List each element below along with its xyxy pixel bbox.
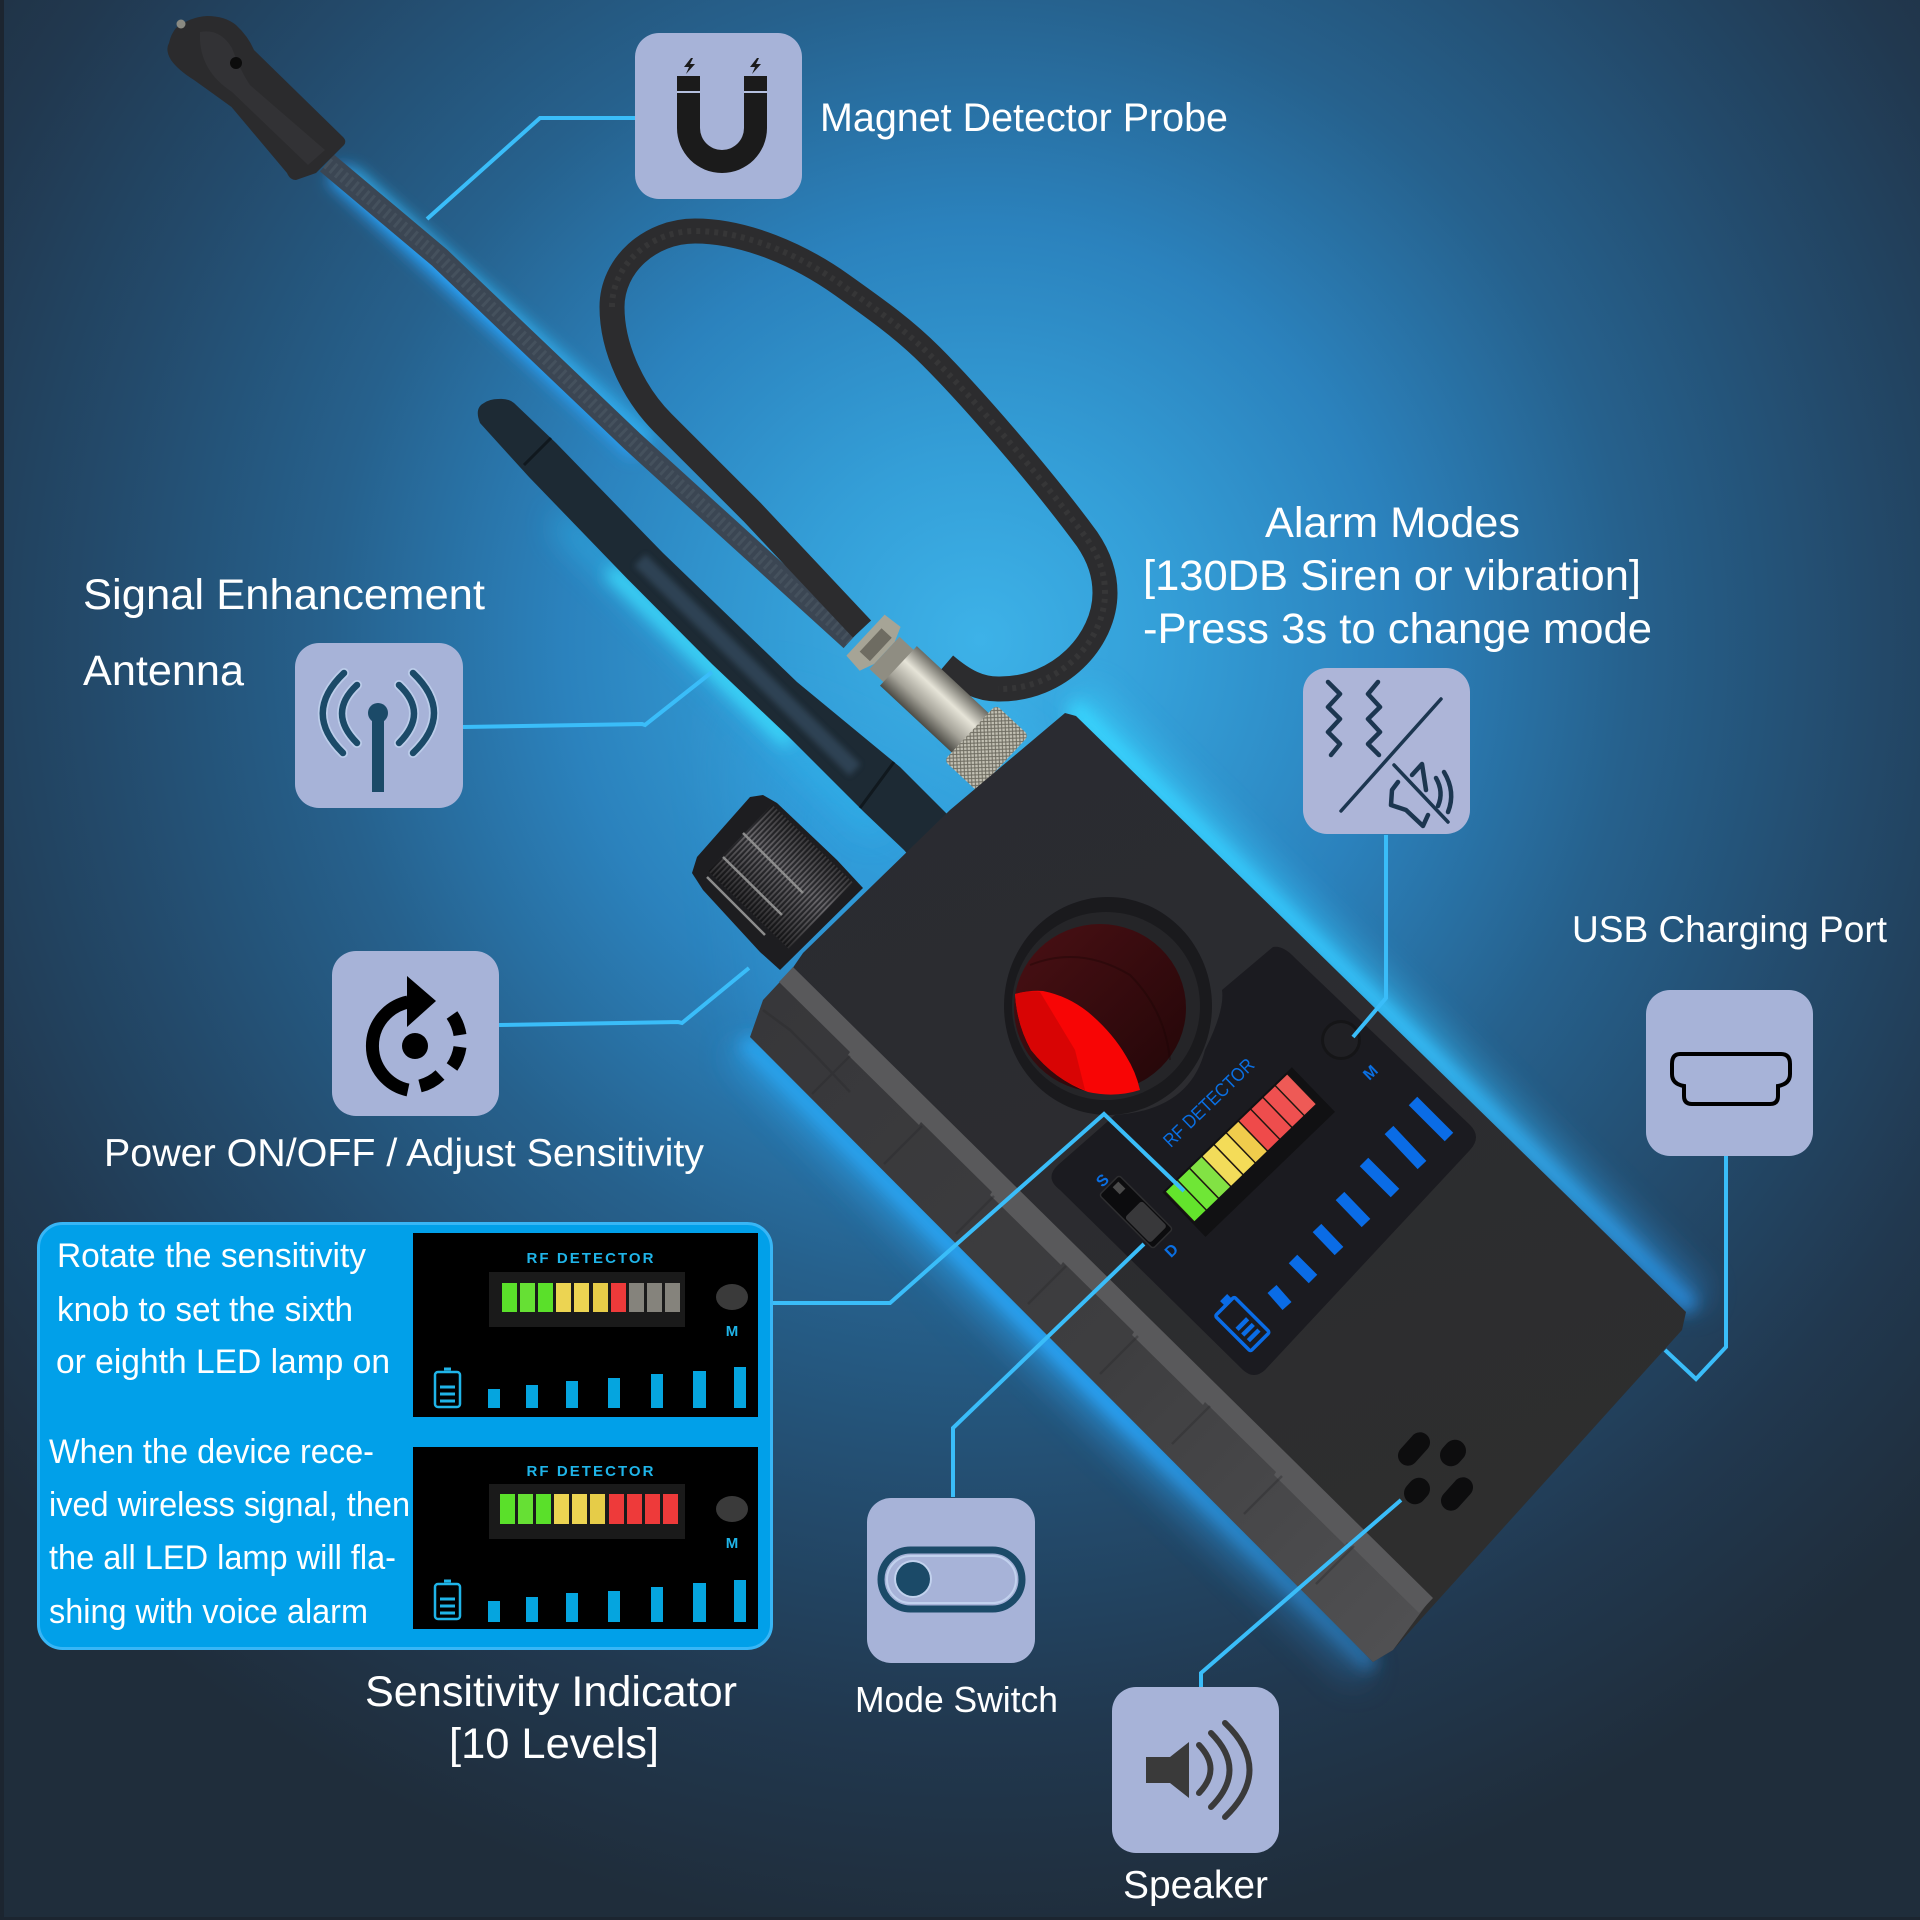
sensitivity indicator label: Sensitivity Indicator (365, 1668, 737, 1716)
antenna icon tile (295, 643, 463, 808)
panel text: rotate: Rotate the sensitivity (57, 1237, 366, 1275)
LED bar (1162, 1067, 1335, 1237)
D label: D (1162, 1241, 1182, 1261)
usb icon tile (1646, 990, 1813, 1156)
M label: M (1360, 1062, 1382, 1084)
control panel (1004, 897, 1476, 1375)
connector (840, 607, 1029, 791)
panel text: alarm: ived wireless signal, then (49, 1486, 410, 1524)
leader lines (427, 118, 1726, 1687)
speaker holes (1394, 1428, 1477, 1515)
magnet icon tile (635, 33, 802, 199)
panel text: rotate: or eighth LED lamp on (56, 1343, 390, 1381)
probe head (167, 16, 345, 180)
alarm modes label: Alarm Modes (1265, 499, 1520, 547)
signal bars (1272, 1101, 1449, 1306)
alarm modes label (1143, 499, 1652, 653)
antenna label: Signal Enhancement (83, 571, 485, 619)
sensitivity indicator label: [10 Levels] (449, 1720, 659, 1768)
glow behind device (335, 172, 1700, 1676)
antenna label: Antenna (83, 647, 244, 695)
probe cable (327, 163, 851, 640)
S label: S (1093, 1171, 1113, 1191)
alarm modes label: [130DB Siren or vibration] (1143, 552, 1641, 600)
panel text: rotate: knob to set the sixth (57, 1291, 353, 1329)
indicator screen: all levels (413, 1447, 758, 1629)
mode switch icon tile (867, 1498, 1035, 1663)
power knob (692, 795, 863, 970)
sensitivity panel (38, 1224, 772, 1648)
mode button (1321, 1020, 1361, 1060)
sensitivity indicator label (365, 1668, 737, 1768)
panel text: alarm: shing with voice alarm (49, 1593, 368, 1631)
slide switch (1099, 1175, 1173, 1249)
antenna (478, 399, 975, 880)
power label: Power ON/OFF / Adjust Sensitivity (104, 1132, 704, 1175)
panel text: alarm: the all LED lamp will fla- (49, 1539, 396, 1577)
panel text: rotate (56, 1237, 390, 1381)
indicator screen: all levels: RF DETECTOR (526, 1463, 654, 1480)
device top face (760, 713, 1686, 1662)
panel text: alarm: When the device rece- (49, 1433, 374, 1471)
panel text: alarm (49, 1433, 410, 1631)
indicator screen: sixth level: RF DETECTOR (526, 1250, 654, 1267)
indicator screen: all levels: M (726, 1535, 738, 1552)
mode switch label: Mode Switch (855, 1679, 1058, 1720)
RF DETECTOR label: RF DETECTOR (1160, 1055, 1259, 1152)
antenna label (83, 571, 485, 695)
magnet probe label: Magnet Detector Probe (820, 96, 1228, 140)
indicator screen: sixth level (413, 1233, 758, 1417)
usb label: USB Charging Port (1572, 909, 1888, 950)
lens (1004, 897, 1212, 1115)
device side (750, 967, 1433, 1662)
battery icon (1210, 1292, 1270, 1351)
power icon tile (332, 951, 499, 1116)
speaker label: Speaker (1123, 1864, 1268, 1907)
indicator screen: sixth level: M (726, 1323, 738, 1340)
alarm modes label: -Press 3s to change mode (1143, 605, 1652, 653)
speaker icon tile (1112, 1687, 1279, 1853)
alarm icon tile (1303, 668, 1470, 834)
loop cable (612, 231, 1105, 689)
